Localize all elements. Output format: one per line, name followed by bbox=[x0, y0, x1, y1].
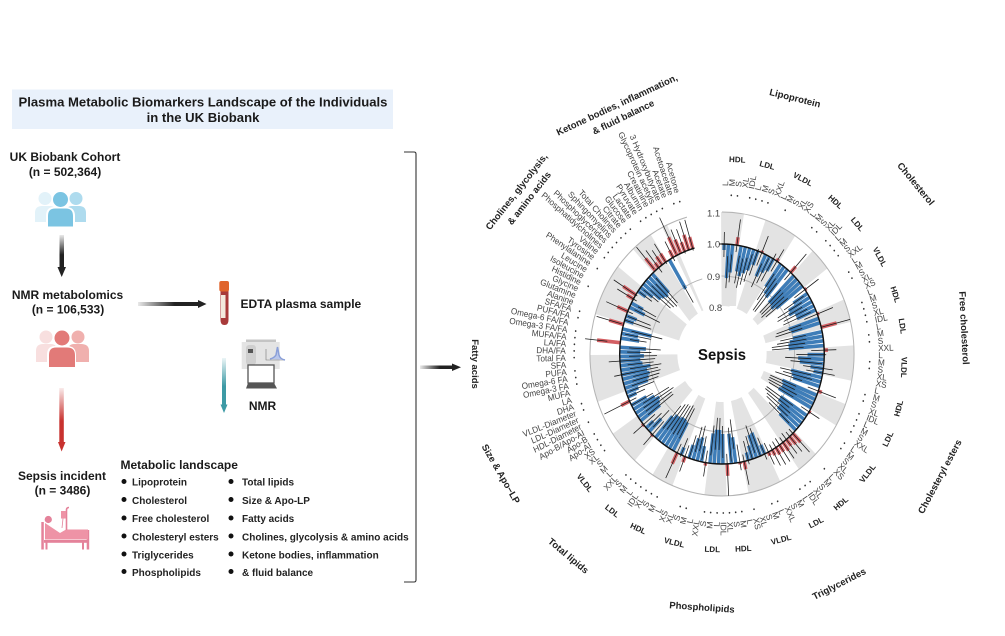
particle size and metabolite labels: left half: LA bbox=[561, 395, 573, 408]
particle size labels: right half: L bbox=[753, 184, 763, 192]
lipoprotein subclass group labels: HDL bbox=[729, 155, 746, 165]
radial axis labels: 1.1 bbox=[707, 208, 720, 220]
icon: red people group bbox=[36, 330, 89, 368]
biomarker category labels: Triglycerides bbox=[811, 566, 868, 603]
particle size and metabolite labels: left half: Tyrosine bbox=[566, 235, 597, 262]
particle size labels: right half: XL bbox=[872, 305, 885, 318]
particle size labels: right half: M bbox=[727, 179, 737, 187]
particle size and metabolite labels: left half: Alanine bbox=[546, 288, 575, 307]
particle size and metabolite labels: left half: Sphingomyelins bbox=[566, 189, 614, 240]
particle size labels: right half: M bbox=[868, 292, 878, 304]
particle size and metabolite labels: left half: VLDL-Diameter bbox=[521, 408, 578, 439]
particle size and metabolite labels: left half: L bbox=[712, 521, 722, 527]
particle size labels: right half: M bbox=[845, 450, 856, 462]
particle size and metabolite labels: left half: M bbox=[646, 503, 658, 514]
particle size and metabolite labels: left half: Isoleucine bbox=[549, 253, 586, 281]
NMR metabolomics heading: NMR metabolomics bbox=[12, 288, 123, 302]
list left column: Free cholesterol bbox=[132, 514, 209, 525]
biomarker category labels: & amino acids bbox=[506, 170, 554, 227]
particle size and metabolite labels: left half: Total FA bbox=[536, 353, 566, 364]
list bullets bbox=[122, 479, 234, 574]
list right column bbox=[242, 478, 409, 579]
NMR metabolomics heading: (n = 106,533) bbox=[32, 302, 104, 316]
list left column: Cholesteryl esters bbox=[132, 532, 219, 544]
lipoprotein subclass group labels: LDL bbox=[881, 430, 896, 448]
centre label: Sepsis bbox=[698, 347, 746, 364]
list left column: Phospholipids bbox=[132, 568, 201, 579]
particle size labels: right half: XS bbox=[751, 517, 763, 531]
particle size labels: right half: S bbox=[856, 432, 866, 444]
lipoprotein subclass group labels: VLDL bbox=[575, 472, 595, 494]
particle size labels: right half: XXL bbox=[772, 179, 787, 198]
lipoprotein subclass group labels: LDL bbox=[758, 159, 776, 172]
particle size labels: right half: L bbox=[800, 494, 811, 504]
biomarker category labels: Phospholipids bbox=[669, 600, 735, 616]
particle size and metabolite labels: left half: S bbox=[641, 499, 652, 509]
particle size labels: right half: L bbox=[850, 254, 859, 266]
NMR label: NMR bbox=[249, 399, 276, 413]
particle size and metabolite labels: left half: Apo-AI bbox=[567, 440, 593, 463]
particle size and metabolite labels: left half: S bbox=[613, 478, 624, 490]
list right column: Size & Apo-LP bbox=[242, 496, 310, 507]
lipoprotein subclass group labels: VLDL bbox=[871, 246, 888, 268]
list heading: Metabolic landscape bbox=[120, 458, 238, 472]
particle size and metabolite labels: left half: S bbox=[595, 457, 605, 469]
particle size and metabolite labels: left half: MUFA bbox=[547, 387, 571, 403]
particle size and metabolite labels: left half bbox=[509, 130, 722, 537]
circular chart: hazard ratios for sepsis bbox=[509, 130, 894, 537]
particle size labels: right half: XXL bbox=[878, 342, 894, 353]
particle size labels: right half: IDL bbox=[746, 174, 758, 190]
lipoprotein subclass group labels: LDL bbox=[897, 318, 908, 335]
particle size labels: right half: S bbox=[732, 521, 742, 528]
particle size labels: right half: IDL bbox=[719, 522, 728, 536]
arrow: plasma sample to NMR bbox=[220, 358, 228, 413]
lipoprotein subclass group labels: HDL bbox=[826, 193, 845, 211]
biomarker category labels bbox=[469, 72, 971, 616]
particle size labels: right half: IDL bbox=[865, 412, 881, 427]
particle size labels: right half: XL bbox=[740, 176, 751, 189]
lipoprotein subclass group labels: VLDL bbox=[770, 533, 792, 547]
particle size labels: right half: M bbox=[859, 425, 870, 438]
lipoprotein subclass group labels bbox=[575, 155, 909, 554]
particle size and metabolite labels: left half: Albumin bbox=[622, 180, 646, 213]
particle size labels: right half: XS bbox=[863, 277, 877, 291]
particle size labels: right half: S bbox=[817, 481, 828, 493]
particle size and metabolite labels: left half: Lactate bbox=[611, 191, 635, 221]
particle size and metabolite labels: left half: Phenylalanine bbox=[544, 230, 593, 268]
EDTA label: EDTA plasma sample bbox=[240, 297, 362, 311]
radial axis labels: 1.0 bbox=[707, 240, 720, 250]
particle size labels: right half: XS bbox=[875, 378, 888, 390]
biomarker category labels: Cholines, glycolysis, bbox=[484, 152, 550, 232]
biomarker category labels: Cholesterol bbox=[894, 161, 936, 208]
particle size and metabolite labels: left half: IDL bbox=[625, 491, 640, 509]
particle size and metabolite labels: left half: HDL-Diameter bbox=[532, 421, 583, 455]
particle size and metabolite labels: left half: Histidine bbox=[550, 263, 583, 287]
particle size labels: right half: XL bbox=[868, 406, 880, 419]
particle size labels: right half: S bbox=[877, 335, 884, 346]
particle size labels: right half: L bbox=[827, 472, 837, 483]
particle size and metabolite labels: left half: SFA/FA bbox=[544, 296, 573, 314]
arrow: NMR metabolomics to sepsis bbox=[58, 388, 66, 452]
particle size and metabolite labels: left half: M bbox=[705, 521, 715, 529]
particle size labels: right half: S bbox=[842, 242, 852, 254]
lipoprotein subclass group labels: LDL bbox=[704, 545, 720, 554]
particle size and metabolite labels: left half: Phosphoglycerides bbox=[552, 188, 609, 245]
particle size labels: right half: S bbox=[857, 266, 867, 278]
particle size and metabolite labels: left half: Phosphatidylcholines bbox=[540, 190, 605, 251]
list left column bbox=[132, 478, 219, 579]
biomarker category labels: Free cholesterol bbox=[956, 291, 971, 365]
list left column: Cholesterol bbox=[132, 496, 187, 507]
biomarker category labels: Lipoprotein bbox=[768, 87, 822, 110]
particle size and metabolite labels: left half: L bbox=[685, 517, 695, 524]
particle size and metabolite labels: left half: Glycine bbox=[551, 273, 580, 294]
particle size labels: right half: M bbox=[877, 328, 884, 339]
title banner bbox=[12, 90, 393, 129]
particle size and metabolite labels: left half: Apo-B/Apo-AI bbox=[537, 428, 586, 462]
particle size labels: right half: S bbox=[790, 197, 801, 208]
particle size labels: right half: S bbox=[764, 513, 775, 522]
lipoprotein subclass group labels: VLDL bbox=[663, 536, 686, 550]
particle size and metabolite labels: left half: L bbox=[624, 487, 635, 497]
list left column: Lipoprotein bbox=[132, 478, 187, 488]
particle size labels: right half: S bbox=[818, 217, 829, 228]
NMR metabolomics heading bbox=[12, 288, 123, 316]
radial axis labels bbox=[707, 208, 722, 314]
particle size labels: right half: L bbox=[862, 419, 871, 430]
particle size and metabolite labels: left half: L bbox=[604, 468, 614, 479]
arrow: bracket to chart bbox=[420, 364, 461, 371]
list right column: Ketone bodies, inflammation bbox=[242, 550, 379, 562]
particle size labels: right half: L bbox=[808, 209, 818, 219]
lipoprotein subclass group labels: HDL bbox=[832, 495, 850, 512]
cohort heading bbox=[10, 150, 120, 179]
particle size and metabolite labels: left half: M bbox=[678, 516, 689, 525]
particle size labels: right half: M bbox=[770, 510, 782, 521]
particle size labels: right half: M bbox=[813, 212, 825, 224]
particle size and metabolite labels: left half: Apo-B bbox=[565, 434, 590, 455]
title banner: in the UK Biobank bbox=[147, 110, 260, 125]
particle size labels: right half: S bbox=[789, 501, 800, 512]
particle size labels: right half: XXL bbox=[852, 438, 871, 455]
particle size and metabolite labels: left half: Omega-3 FA/FA bbox=[509, 315, 568, 335]
lipoprotein subclass group labels: VLDL bbox=[791, 171, 814, 188]
particle size labels: right half: XXL bbox=[783, 505, 798, 524]
particle size and metabolite labels: left half: Acetone bbox=[664, 161, 682, 195]
particle size and metabolite labels: left half: PUFA/FA bbox=[536, 302, 571, 321]
lipoprotein subclass group labels: VLDL bbox=[899, 357, 909, 378]
biomarker category labels: Fatty acids bbox=[469, 339, 480, 389]
particle size and metabolite labels: left half: Glutamine bbox=[539, 277, 578, 300]
icon: blue people group bbox=[35, 191, 86, 227]
list right column: Fatty acids bbox=[242, 514, 295, 525]
null ring at hazard ratio 1.0 bbox=[620, 244, 824, 464]
particle size labels: right half: L bbox=[875, 321, 882, 332]
particle size and metabolite labels: left half: Acetate bbox=[650, 168, 670, 200]
particle size labels: right half: L bbox=[745, 518, 755, 525]
particle size and metabolite labels: left half: S bbox=[698, 520, 708, 527]
particle size and metabolite labels: left half: Omega-3 FA bbox=[522, 381, 570, 400]
lipoprotein subclass group labels: HDL bbox=[629, 521, 648, 536]
particle size and metabolite labels: left half: LA/FA bbox=[544, 337, 567, 349]
particle size labels: right half: IDL bbox=[828, 221, 844, 238]
particle size labels: right half: XS bbox=[832, 466, 846, 482]
particle size and metabolite labels: left half: M bbox=[598, 463, 610, 476]
lipoprotein subclass group labels: LDL bbox=[807, 515, 825, 530]
particle size labels: right half: M bbox=[878, 357, 885, 368]
particle size and metabolite labels: left half: Leucine bbox=[560, 250, 589, 275]
particle size and metabolite labels: left half: XXL bbox=[602, 473, 619, 493]
biomarker category labels: Total lipids bbox=[546, 536, 590, 576]
particle size and metabolite labels: left half: Glycoprotein acetyls bbox=[616, 130, 657, 205]
grey sector inner flares bbox=[653, 246, 739, 321]
reference ring 0.9 bbox=[649, 276, 795, 432]
reference ring 1.1 bbox=[590, 212, 854, 496]
particle size labels: right half: M bbox=[738, 520, 749, 528]
lipoprotein subclass group labels: LDL bbox=[849, 215, 866, 233]
particle size and metabolite labels: left half: M bbox=[618, 483, 629, 495]
particle size and metabolite labels: left half: XL bbox=[664, 511, 676, 525]
radial axis labels: 0.9 bbox=[707, 272, 720, 283]
list right column: Cholines, glycolysis & amino acids bbox=[242, 532, 409, 544]
particle size labels: right half: S bbox=[766, 187, 777, 196]
lipoprotein subclass group labels: HDL bbox=[889, 285, 902, 304]
radial axis labels: 0.8 bbox=[709, 303, 722, 314]
particle size labels: right half: M bbox=[872, 392, 881, 404]
particle size and metabolite labels: left half: Omega-6 FA/FA bbox=[510, 306, 570, 328]
lipoprotein subclass group labels: VLDL bbox=[858, 463, 878, 485]
particle size and metabolite labels: left half: Omega-6 FA bbox=[521, 374, 568, 391]
particle size labels: right half: L bbox=[849, 444, 858, 455]
particle size labels: right half: XL bbox=[796, 196, 810, 211]
icon: NMR machine and laptop bbox=[242, 340, 285, 388]
particle size labels: right half: L bbox=[874, 385, 880, 396]
particle size labels: right half: XL bbox=[836, 461, 850, 476]
biomarker category labels: Size & Apo−LP bbox=[479, 443, 522, 507]
cohort heading: (n = 502,364) bbox=[29, 165, 101, 179]
particle size labels: right half: L bbox=[833, 232, 843, 243]
hazard ratio bars with confidence intervals and significance dots bbox=[573, 194, 871, 514]
particle size and metabolite labels: left half: XXL bbox=[690, 519, 702, 537]
particle size labels: right half: M bbox=[822, 477, 834, 489]
sepsis incident heading bbox=[18, 469, 106, 498]
title banner: Plasma Metabolic Biomarkers Landscape of the Individuals bbox=[19, 94, 387, 110]
list right column: Total lipids bbox=[242, 478, 294, 488]
axis tick at 1.0 bbox=[719, 243, 724, 245]
particle size labels: right half: M bbox=[853, 259, 864, 272]
sepsis incident heading: (n = 3486) bbox=[35, 484, 90, 498]
icon: blood tube bbox=[219, 281, 229, 325]
biomarker category labels: Cholesteryl esters bbox=[916, 438, 965, 516]
particle size and metabolite labels: left half: Valine bbox=[577, 234, 601, 256]
particle size labels: right half: XL bbox=[876, 371, 888, 383]
particle size labels: right half: M bbox=[784, 193, 796, 204]
lipoprotein subclass group labels: HDL bbox=[735, 544, 752, 554]
biomarker category labels: & fluid balance bbox=[591, 98, 656, 138]
particle size labels: right half: L bbox=[776, 508, 787, 516]
sepsis incident heading: Sepsis incident bbox=[18, 469, 106, 483]
particle size and metabolite labels: left half: S bbox=[672, 513, 683, 522]
particle size labels: right half: XL bbox=[860, 270, 874, 285]
particle size and metabolite labels: left half: PUFA bbox=[545, 367, 567, 379]
particle size and metabolite labels: left half: LDL-Diameter bbox=[529, 415, 580, 446]
icon: hospital bed patient bbox=[41, 508, 89, 550]
arrow: to plasma sample bbox=[138, 300, 206, 308]
particle size labels: right half: XXL bbox=[846, 242, 864, 260]
particle size labels: right half: S bbox=[870, 299, 879, 311]
particle size and metabolite labels: left half: L bbox=[653, 506, 664, 514]
biomarker category labels: Ketone bodies, inflammation, bbox=[555, 72, 680, 138]
particle size labels: right half: XL bbox=[758, 515, 770, 528]
alternating grey sectors bbox=[634, 259, 810, 449]
particle size labels: right half: XL bbox=[725, 522, 735, 533]
particle size labels: right half: L bbox=[778, 192, 789, 201]
particle size and metabolite labels: left half: DHA bbox=[556, 401, 575, 417]
particle size labels: right half: S bbox=[877, 364, 884, 375]
particle size labels: right half: M bbox=[760, 184, 771, 194]
list left column: Triglycerides bbox=[132, 550, 194, 562]
particle size and metabolite labels: left half: Creatinine bbox=[625, 169, 652, 209]
arrow: cohort to NMR bbox=[58, 235, 66, 277]
particle size labels: right half: XS bbox=[802, 199, 816, 215]
lipoprotein subclass group labels: HDL bbox=[892, 399, 905, 418]
particle size labels: right half bbox=[719, 174, 894, 536]
particle size and metabolite labels: left half: SFA bbox=[550, 360, 567, 371]
particle size labels: right half: IDL bbox=[874, 312, 889, 325]
particle size labels: right half: L bbox=[878, 350, 883, 360]
bracket bbox=[404, 152, 416, 582]
particle size labels: right half: IDL bbox=[806, 490, 821, 507]
particle size and metabolite labels: left half: XS bbox=[582, 446, 597, 461]
particle size and metabolite labels: left half: MUFA/FA bbox=[531, 328, 567, 342]
particle size labels: right half: S bbox=[733, 180, 744, 187]
particle size and metabolite labels: left half: XL bbox=[632, 495, 646, 510]
particle size and metabolite labels: left half: 3 Hydroxybutyrate bbox=[628, 133, 664, 203]
particle size labels: right half: M bbox=[837, 236, 849, 249]
lipoprotein subclass group labels: LDL bbox=[603, 503, 621, 519]
particle size labels: right half: L bbox=[720, 181, 730, 186]
cohort heading: UK Biobank Cohort bbox=[10, 150, 120, 164]
particle size labels: right half: XL bbox=[823, 218, 837, 233]
particle size and metabolite labels: left half: XS bbox=[657, 508, 670, 523]
particle size labels: right half: M bbox=[795, 498, 806, 509]
particle size and metabolite labels: left half: Glucose bbox=[603, 194, 629, 226]
particle size labels: right half: S bbox=[870, 399, 878, 410]
particle size labels: right half: S bbox=[841, 455, 851, 467]
particle size labels: right half: L bbox=[866, 286, 874, 298]
list right column: & fluid balance bbox=[242, 568, 314, 579]
particle size and metabolite labels: left half: DHA/FA bbox=[536, 345, 566, 356]
particle size and metabolite labels: left half: Acetoacetate bbox=[651, 145, 676, 197]
particle size and metabolite labels: left half: Pyruvate bbox=[614, 182, 640, 217]
particle size and metabolite labels: left half: Citrate bbox=[601, 204, 624, 230]
particle size and metabolite labels: left half: Total Cholines bbox=[577, 187, 619, 235]
particle size labels: right half: XL bbox=[811, 486, 825, 501]
metabolic landscape list bbox=[120, 458, 409, 579]
particle size and metabolite labels: left half: XL bbox=[587, 452, 601, 467]
